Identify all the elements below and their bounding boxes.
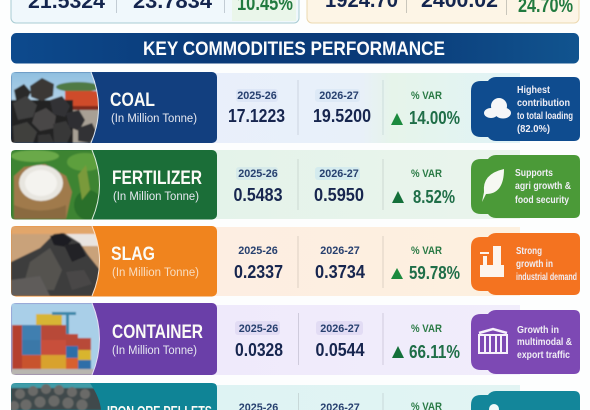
callout: container: multimodal & xyxy=(517,337,572,348)
stat: fertilizer percent variance xyxy=(392,168,455,207)
stat: 2025-26 coal: 17.1223 xyxy=(228,106,285,126)
stat: fertilizer percent variance: 8.52% xyxy=(413,187,455,207)
stat: 2026-27 slag: 2026-27 xyxy=(320,245,360,257)
callout: fertilizer xyxy=(471,155,580,218)
label card: slag: SLAG xyxy=(111,243,155,265)
stat: container percent variance xyxy=(392,323,460,362)
stat: 2026-27 container: 2026-27 xyxy=(320,323,360,335)
label card: container: (In Million Tonne) xyxy=(112,345,197,357)
stat: 2025-26 container xyxy=(235,321,283,360)
panel: container xyxy=(11,303,580,375)
stat: 2025-26 coal: 2025-26 xyxy=(237,90,277,102)
callout: container: export traffic xyxy=(517,350,570,361)
stat: 2026-27 fertilizer: 2026-27 xyxy=(319,168,359,180)
stat: 2025-26 container: 0.0328 xyxy=(235,340,283,360)
panel: coal xyxy=(11,72,580,143)
label card: coal: (In Million Tonne) xyxy=(111,113,197,125)
icon: shipping container xyxy=(479,329,507,353)
icon: factory xyxy=(480,246,504,277)
stat: container percent variance: % VAR xyxy=(411,323,442,335)
panel: iron ore pellets xyxy=(9,383,580,410)
callout: coal: to total loading xyxy=(517,111,573,122)
stat: 2025-26 fertilizer: 2025-26 xyxy=(238,168,278,180)
photo: slag heap xyxy=(11,226,107,296)
icon: coal lumps xyxy=(484,98,511,118)
stat: 2026-27 container xyxy=(316,321,364,360)
callout: coal: (82.0%) xyxy=(517,124,550,135)
photo: iron ore pellets xyxy=(9,383,103,410)
stat: 2025-26 coal xyxy=(228,89,285,126)
label card: container: CONTAINER xyxy=(112,321,203,343)
stat: 2025-26 slag xyxy=(234,245,283,282)
label card: fertilizer: (In Million Tonne) xyxy=(113,191,199,203)
stat: 2026-27 slag xyxy=(315,245,365,282)
stat: 2026-27 slag: 0.3734 xyxy=(315,262,365,282)
stat: 2026-27 coal: 2026-27 xyxy=(319,90,359,102)
stat: coal percent variance: 14.00% xyxy=(409,108,460,128)
callout: container: Growth in xyxy=(517,325,559,336)
label card: coal: COAL xyxy=(110,89,155,111)
label card: fertilizer xyxy=(11,150,217,220)
callout: coal: contribution xyxy=(517,98,570,109)
callout: fertilizer: Supports xyxy=(515,168,553,179)
heading: key commodities performance xyxy=(11,33,579,64)
icon: leaf xyxy=(482,169,504,202)
stat: 2025-26 fertilizer xyxy=(234,167,282,205)
stat: 2026-27 fertilizer: 0.5950 xyxy=(314,185,364,205)
callout: coal xyxy=(471,77,580,141)
callout: container xyxy=(471,310,580,374)
stat: 2026-27 fertilizer xyxy=(314,167,364,205)
label card: slag: (In Million Tonne) xyxy=(112,267,199,279)
callout: coal: Highest xyxy=(517,85,551,96)
callout: slag: growth in xyxy=(516,259,553,270)
stat: slag percent variance: 59.78% xyxy=(409,263,460,283)
stat: 2026-27 container: 0.0544 xyxy=(316,340,364,360)
stat: 2026-27 coal xyxy=(313,89,371,126)
stat: coal percent variance: % VAR xyxy=(411,90,442,102)
stat: fertilizer percent variance: % VAR xyxy=(411,168,442,180)
stat: 2025-26 container: 2025-26 xyxy=(239,323,278,335)
label card: iron ore pellets xyxy=(11,383,217,410)
label card: container xyxy=(11,303,217,375)
stat: 2025-26 slag: 0.2337 xyxy=(234,262,283,282)
callout: slag xyxy=(471,233,580,295)
stat: container percent variance: 66.11% xyxy=(409,342,460,362)
photo: fertilizer sack and plants xyxy=(11,150,107,220)
label card: coal xyxy=(11,72,217,143)
stat: 2026-27 coal: 19.5200 xyxy=(313,106,371,126)
panel: total loading summary xyxy=(11,0,299,23)
stat: 2025-26 fertilizer: 0.5483 xyxy=(234,185,282,205)
label card: slag xyxy=(11,226,217,296)
icon: pellets xyxy=(489,404,499,410)
heading: key commodities performance: KEY COMMODITIES PERFORMANCE xyxy=(143,38,445,60)
stat: slag percent variance xyxy=(391,245,460,283)
photo: container stacks and crane xyxy=(11,303,107,375)
callout: iron ore pellets xyxy=(471,391,580,410)
stat: slag percent variance: % VAR xyxy=(411,245,442,257)
panel: fertilizer xyxy=(11,150,580,220)
stat: coal percent variance xyxy=(391,90,460,128)
panel: slag xyxy=(11,226,580,296)
callout: fertilizer: agri growth & xyxy=(515,181,571,192)
callout: slag: Strong xyxy=(516,246,542,257)
photo: coal lumps and rail wagon xyxy=(11,72,106,143)
label card: fertilizer: FERTILIZER xyxy=(112,167,202,189)
stat: 2025-26 slag: 2025-26 xyxy=(238,245,278,257)
panel: total revenue summary xyxy=(307,0,579,23)
callout: fertilizer: food security xyxy=(515,195,569,206)
